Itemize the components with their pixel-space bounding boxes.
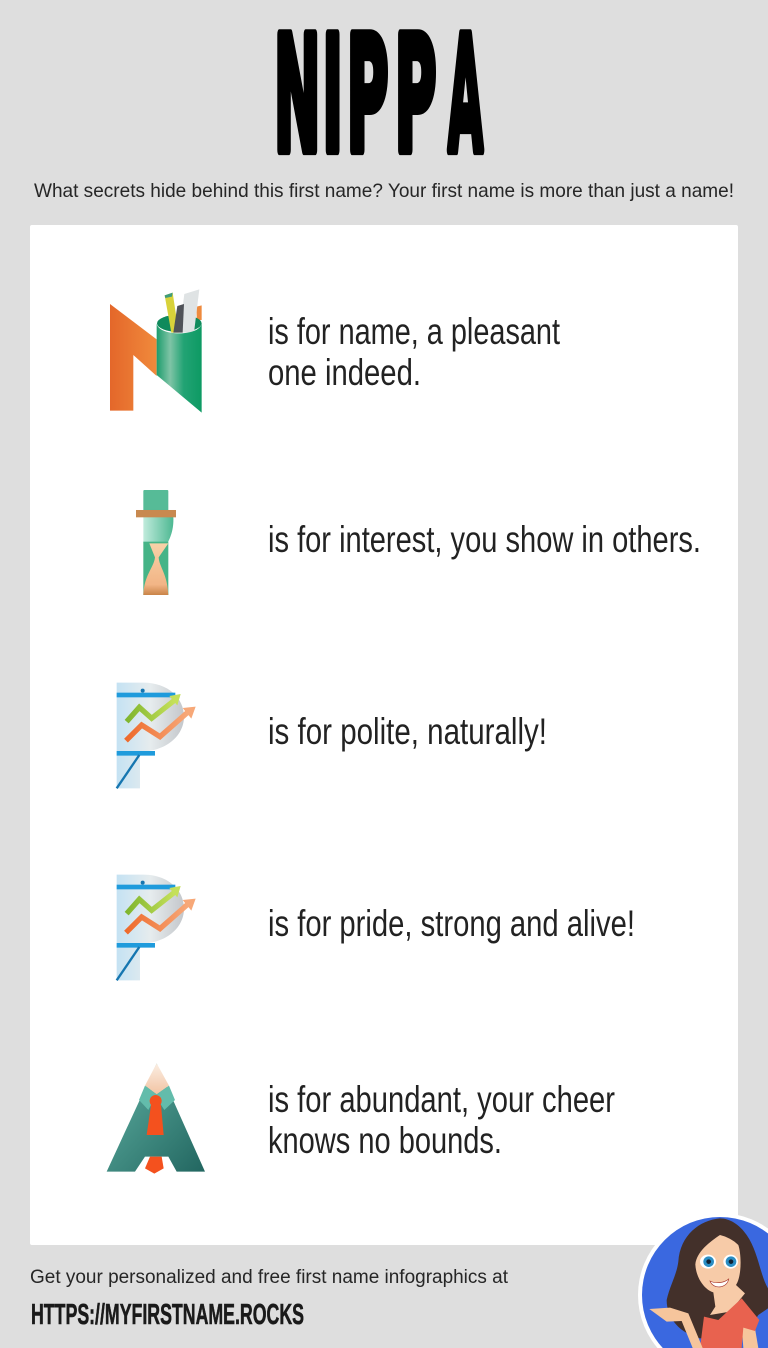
- text: A lines: knows no bounds.: [268, 1120, 502, 1161]
- text: N line: is for name, a pleasant: [268, 311, 561, 352]
- icon: letter I hourglass: [136, 490, 176, 595]
- title: I: [322, 5, 343, 188]
- title: [274, 5, 483, 188]
- title: N: [274, 5, 320, 188]
- text: N line: [268, 311, 561, 393]
- title: P: [347, 5, 389, 188]
- text: second P line: is for pride, strong and alive!: [268, 903, 635, 944]
- footer url: HTTPS://MYFIRSTNAME.ROCKS: [31, 1299, 304, 1331]
- footer text: Get your personalized and free first name infographics at: [30, 1267, 509, 1288]
- title: P: [395, 5, 437, 188]
- text: A lines: is for abundant, your cheer: [268, 1079, 615, 1120]
- subtitle: What secrets hide behind this first name? Your first name is more than just a name!: [34, 180, 734, 202]
- icon: letter N with pencil cup: [110, 289, 202, 413]
- title: A: [448, 5, 483, 188]
- icon: letter A with tie: [107, 1063, 205, 1174]
- text: A lines: [268, 1079, 615, 1161]
- avatar: [638, 1213, 768, 1348]
- icon: letter P chart: [117, 683, 196, 788]
- text: first P line: is for polite, naturally!: [268, 711, 547, 752]
- icon: second letter P chart: [117, 875, 196, 980]
- panel: letters: [30, 225, 738, 1245]
- text: N line: one indeed.: [268, 352, 421, 393]
